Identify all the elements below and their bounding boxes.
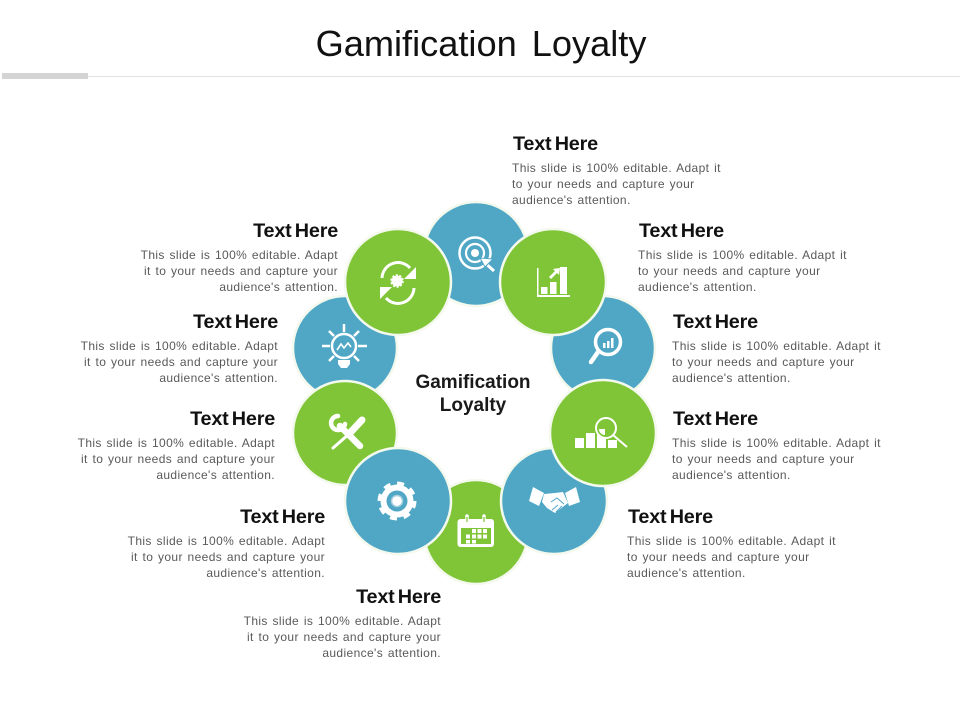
text block: upper right: to your needs and capture your bbox=[638, 264, 821, 278]
circle: right green bbox=[550, 380, 656, 486]
text block: upper left bbox=[140, 220, 338, 294]
text block: top: to your needs and capture your bbox=[512, 177, 695, 191]
text block: lower right bbox=[627, 506, 836, 580]
text block: left lower: it to your needs and capture your bbox=[81, 452, 275, 466]
text block: lower right: This slide is 100% editable. Adapt it bbox=[627, 534, 836, 548]
icon: magnifier with bars bbox=[591, 330, 620, 362]
circle: left green bbox=[293, 381, 397, 485]
circle: lower right blue bbox=[501, 448, 607, 554]
text block: left upper bbox=[80, 311, 278, 385]
icon: wrench and screwdriver bbox=[331, 416, 362, 448]
text block: right upper bbox=[672, 311, 881, 385]
text block: lower left: This slide is 100% editable. Adapt bbox=[128, 534, 325, 548]
text block: lower left: audience's attention. bbox=[206, 566, 325, 580]
icon: gear bbox=[380, 484, 414, 518]
text block: top: This slide is 100% editable. Adapt it bbox=[512, 161, 721, 175]
text block: left upper: Text Here bbox=[193, 311, 278, 333]
circle: right blue bbox=[551, 296, 655, 400]
text block: right upper: audience's attention. bbox=[672, 371, 791, 385]
text block: lower right: to your needs and capture your bbox=[627, 550, 810, 564]
text block: lower left: it to your needs and capture your bbox=[131, 550, 325, 564]
text block: upper right: Text Here bbox=[639, 220, 724, 242]
text block: right lower: to your needs and capture your bbox=[672, 452, 855, 466]
text block: right lower: Text Here bbox=[673, 408, 758, 430]
text block: bottom: it to your needs and capture your bbox=[247, 630, 441, 644]
icon: calendar bbox=[458, 516, 494, 547]
text block: bottom bbox=[244, 586, 441, 660]
circle: upper right green bbox=[500, 229, 606, 335]
center label: Gamification bbox=[415, 372, 531, 393]
text block: right upper: Text Here bbox=[673, 311, 758, 333]
text block: top bbox=[512, 133, 721, 207]
circle: left blue bbox=[293, 296, 397, 400]
icon: growth chart bbox=[537, 267, 570, 297]
header rule bbox=[2, 73, 960, 79]
icon: light bulb bbox=[322, 324, 367, 368]
icon: handshake bbox=[529, 487, 580, 513]
text block: lower right: audience's attention. bbox=[627, 566, 746, 580]
text block: upper left: it to your needs and capture your bbox=[144, 264, 338, 278]
circle: upper left green bbox=[345, 229, 451, 335]
icon: gear with cycle arrows bbox=[380, 263, 416, 303]
circle: lower left blue bbox=[345, 448, 451, 554]
text block: lower right: Text Here bbox=[628, 506, 713, 528]
text block: right upper: to your needs and capture your bbox=[672, 355, 855, 369]
icon: target bbox=[460, 238, 494, 271]
text block: left lower: audience's attention. bbox=[156, 468, 275, 482]
text block: right lower: This slide is 100% editable. Adapt it bbox=[672, 436, 881, 450]
text block: upper left: This slide is 100% editable. Adapt bbox=[141, 248, 338, 262]
text block: upper right bbox=[638, 220, 847, 294]
text block: lower left: Text Here bbox=[240, 506, 325, 528]
center label: Loyalty bbox=[440, 395, 506, 416]
text block: right lower bbox=[672, 408, 881, 482]
text block: bottom: Text Here bbox=[356, 586, 441, 608]
center label bbox=[415, 372, 531, 416]
text block: left lower: This slide is 100% editable. Adapt bbox=[78, 436, 275, 450]
circle: top bbox=[424, 202, 528, 306]
text block: top: Text Here bbox=[513, 133, 598, 155]
text block: bottom: audience's attention. bbox=[322, 646, 441, 660]
icon: bars with magnifier bbox=[575, 418, 627, 448]
text block: left upper: audience's attention. bbox=[159, 371, 278, 385]
text block: left upper: it to your needs and capture your bbox=[84, 355, 278, 369]
title: Gamification Loyalty bbox=[316, 23, 646, 64]
circle: bottom green bbox=[424, 480, 528, 584]
text block: upper right: audience's attention. bbox=[638, 280, 757, 294]
text block: left lower bbox=[78, 408, 275, 482]
text block: right upper: This slide is 100% editable. Adapt it bbox=[672, 339, 881, 353]
text block: upper left: audience's attention. bbox=[219, 280, 338, 294]
text block: lower left bbox=[128, 506, 325, 580]
text block: right lower: audience's attention. bbox=[672, 468, 791, 482]
text block: bottom: This slide is 100% editable. Adapt bbox=[244, 614, 441, 628]
text block: upper right: This slide is 100% editable. Adapt it bbox=[638, 248, 847, 262]
text block: upper left: Text Here bbox=[253, 220, 338, 242]
text block: left lower: Text Here bbox=[190, 408, 275, 430]
text block: left upper: This slide is 100% editable. Adapt bbox=[81, 339, 278, 353]
text block: top: audience's attention. bbox=[512, 193, 631, 207]
